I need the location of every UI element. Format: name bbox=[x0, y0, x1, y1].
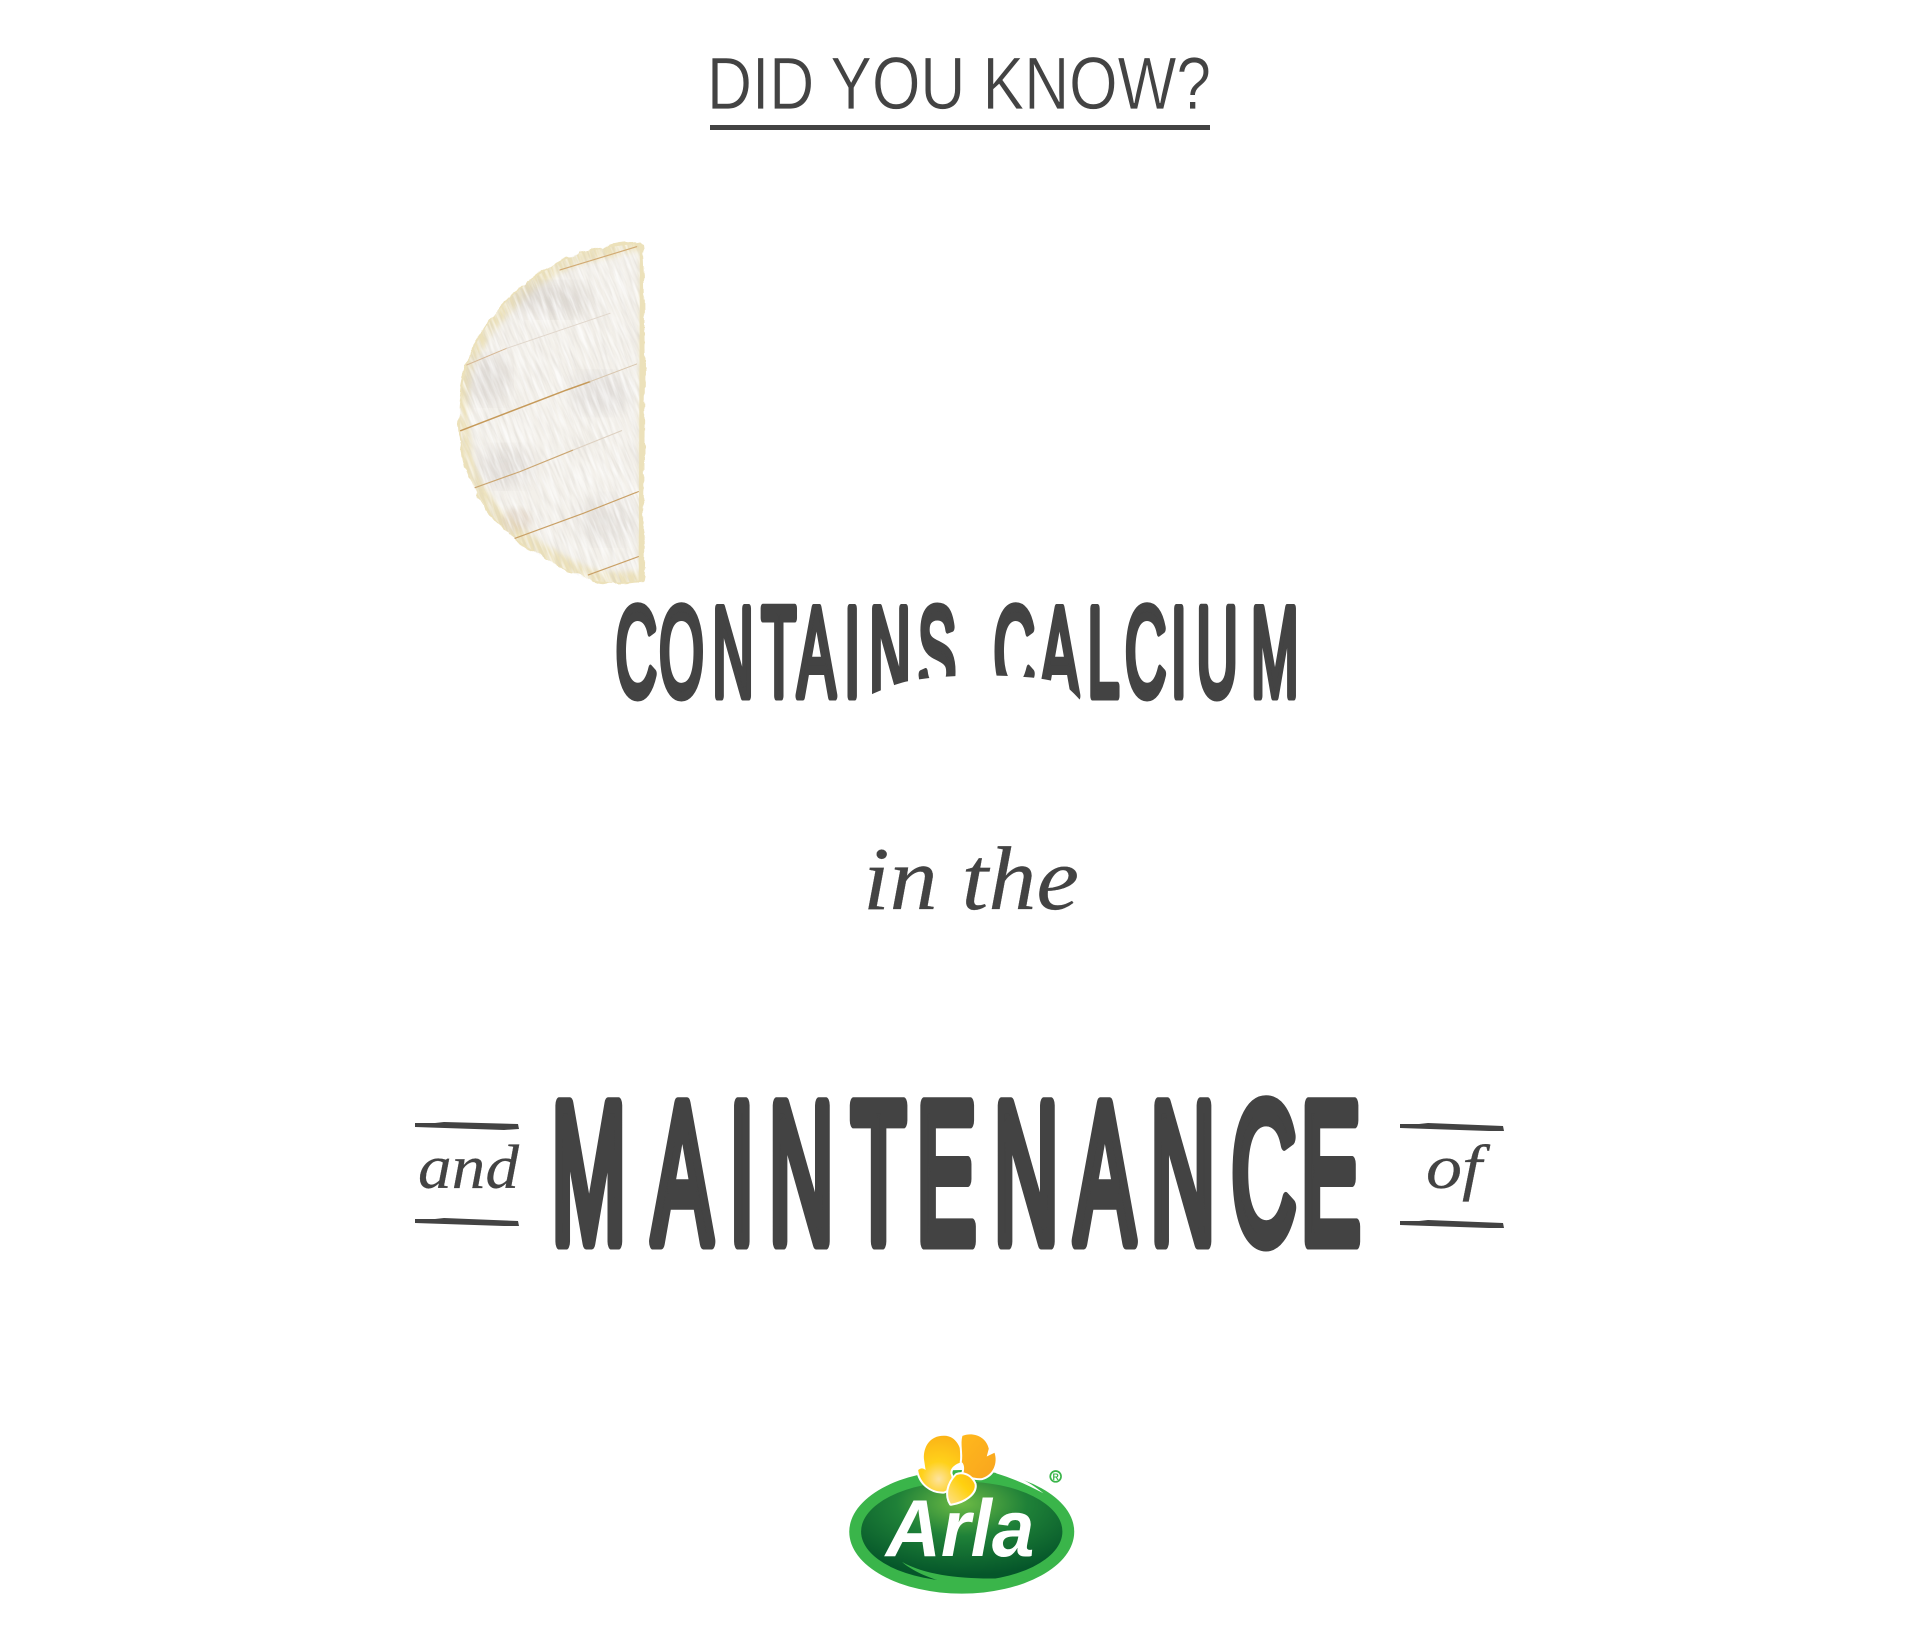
heading: contains calcium: CONTAINS CALCIUM bbox=[616, 581, 1299, 723]
logo registered mark bbox=[1050, 1471, 1061, 1482]
logo: arla bbox=[849, 1434, 1074, 1594]
decorated word: of bbox=[1400, 1123, 1504, 1228]
heading: maintenance: MAINTENANCE bbox=[552, 1062, 1360, 1284]
image: half cheese wheel bbox=[457, 241, 647, 584]
logo registered mark: R bbox=[1052, 1472, 1059, 1482]
logo oval bbox=[849, 1470, 1074, 1594]
logo flower bbox=[918, 1434, 996, 1504]
decorated word: and bbox=[415, 1122, 520, 1226]
text: in the: in the bbox=[863, 830, 1079, 929]
logo wordmark: Arla bbox=[884, 1484, 1034, 1574]
decorated word: of: of bbox=[1426, 1134, 1491, 1202]
decorated word: and: and bbox=[418, 1134, 520, 1202]
title: did you know: DID YOU KNOW? bbox=[707, 42, 1211, 125]
